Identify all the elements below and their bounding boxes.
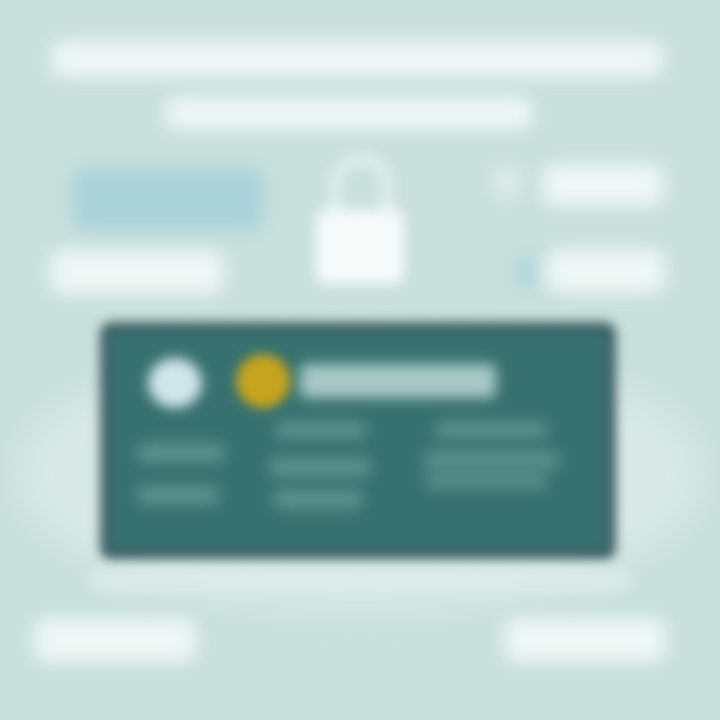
middle column line 1 <box>276 422 366 438</box>
right column line 1 <box>436 422 546 438</box>
title line 2 <box>165 97 533 129</box>
padlock shackle <box>330 154 392 224</box>
card heading <box>300 364 496 398</box>
middle right label <box>512 242 672 300</box>
middle column line 2 <box>270 458 370 476</box>
title <box>46 34 668 136</box>
middle right icon <box>514 255 540 289</box>
top right text <box>542 164 664 206</box>
left label <box>50 250 224 294</box>
middle column line 3 <box>274 490 362 508</box>
right column line 3 <box>426 474 546 488</box>
top right icon <box>492 164 522 200</box>
top left teal badge <box>73 168 263 230</box>
left column line 2 <box>138 486 218 504</box>
right column text <box>420 416 562 494</box>
icon: padlock <box>310 151 410 290</box>
caption under card <box>90 570 630 592</box>
icon: pale blue circle <box>148 358 202 408</box>
left column text <box>134 438 228 510</box>
top right label <box>492 157 670 213</box>
bottom left label <box>34 618 196 662</box>
middle right text <box>546 249 665 293</box>
title line 1 <box>51 41 663 77</box>
right column line 2 <box>424 452 559 468</box>
left column line 1 <box>138 444 224 462</box>
padlock body <box>316 210 404 284</box>
bottom right label <box>504 618 666 662</box>
middle column text <box>266 416 374 514</box>
icon: gold coin <box>236 354 290 408</box>
background glow <box>15 340 705 610</box>
panel: dark teal card <box>100 322 616 560</box>
